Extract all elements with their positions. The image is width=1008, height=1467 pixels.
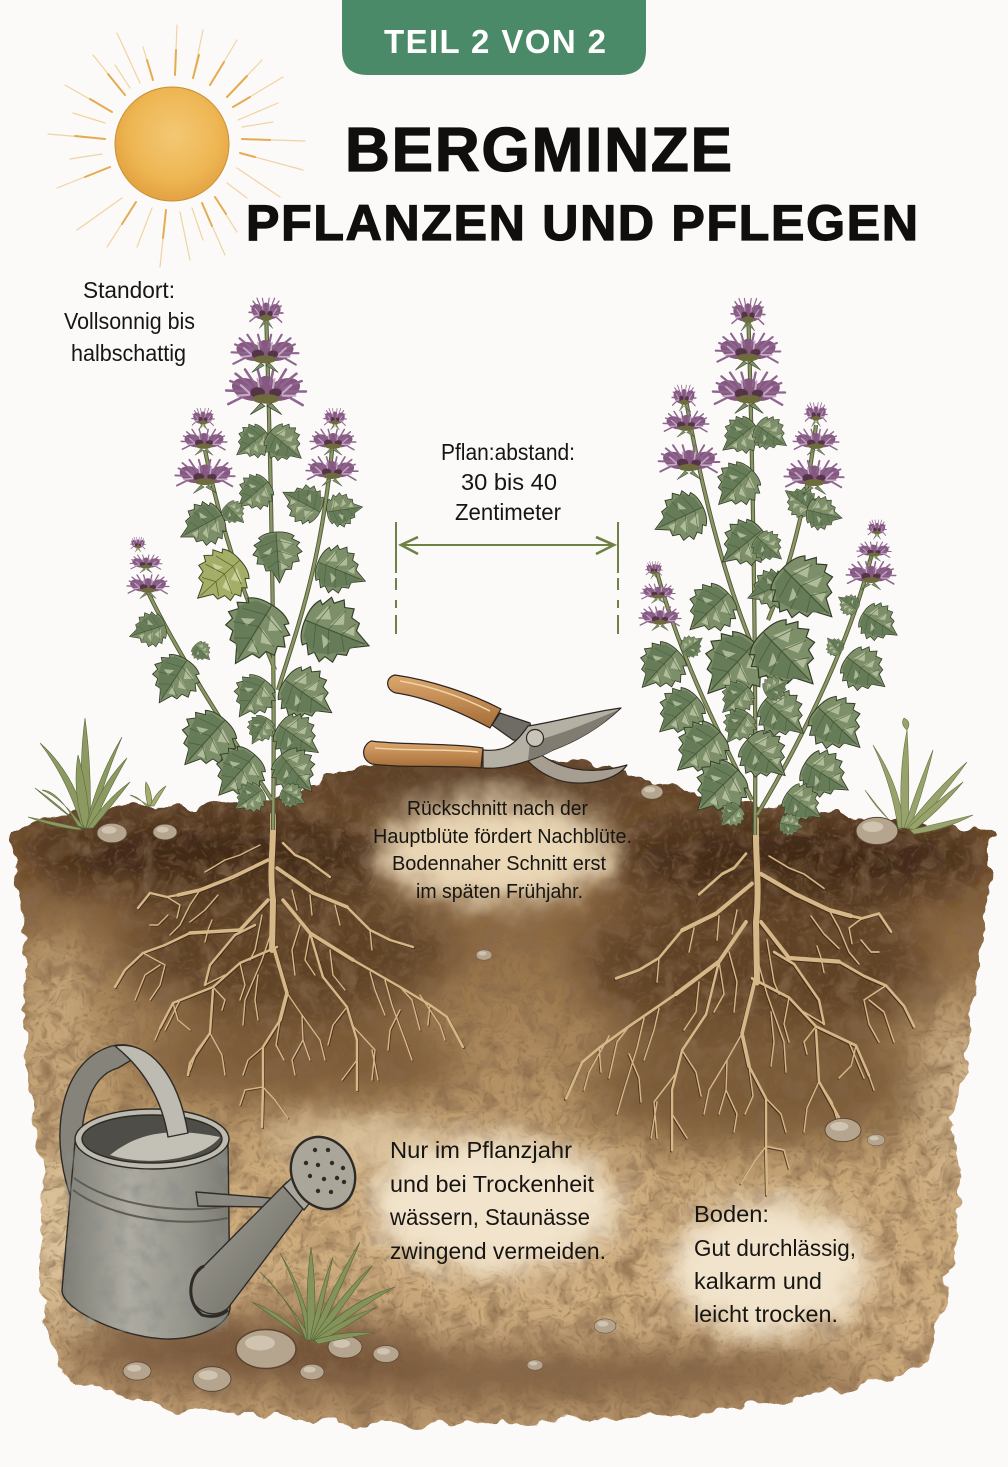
metal patina [66,1150,228,1332]
rose head [279,1126,367,1220]
pivot [526,730,544,746]
stems [147,310,333,830]
text: watering note [389,1137,606,1264]
upper handle [388,675,501,728]
soil washes and texture [0,740,1008,1467]
text: location: Vollsonnig bis [64,308,195,334]
title: BERGMINZE [345,116,732,185]
text: location [64,277,195,366]
soil base [0,750,1008,1440]
title: PFLANZEN UND PFLEGEN [246,195,918,251]
spout brace [196,1192,270,1207]
foliage [124,417,381,822]
stems [655,305,874,835]
grass tuft: left [28,718,166,830]
stones [97,785,898,1391]
left plant roots [115,815,464,1128]
text: pruning note: Rückschnitt nach der [407,798,588,820]
text: watering note: zwingend vermeiden. [390,1238,606,1264]
foliage [624,409,908,839]
grass tuft: beside can [252,1242,395,1344]
spout flange [191,1266,228,1316]
banner: part label: TEIL 2 VON 2 [384,23,606,60]
right plant roots [565,820,914,1195]
icon: pruning shears [364,675,627,783]
can handle [60,1045,145,1195]
title [246,116,918,251]
can opening [75,1109,229,1169]
lower handle [364,741,483,768]
text: soil note: Boden: [694,1201,769,1227]
soil cross-section [0,740,1008,1467]
text: pruning note [373,798,632,903]
text: plant spacing: Pflan:abstand: [441,439,575,465]
long faint rays [48,25,305,267]
text: location: halbschattig [71,340,186,366]
grass tuft: right [865,718,973,834]
icon: sun [48,25,305,267]
text: soil note: leicht trocken. [694,1301,838,1327]
plant: left mint [124,298,381,830]
text: pruning note: Hauptblüte fördert Nachblüte. [373,826,632,848]
text: plant spacing: 30 bis 40 [461,469,557,495]
banner: part label [342,0,646,75]
icon: watering can [60,1045,367,1339]
flower spikes [639,299,896,631]
text: soil note: kalkarm und [694,1268,822,1294]
text: watering note: wässern, Staunässe [389,1204,590,1230]
upper blade and jaw [483,708,621,768]
short strong rays [75,50,270,238]
text: soil note [694,1201,856,1327]
text: soil note: Gut durchlässig, [694,1235,856,1261]
flower spikes [127,298,358,599]
light patch behind soil note [670,1200,870,1336]
lower blade [522,747,627,783]
spout [191,1182,305,1314]
spout collar [283,1178,312,1210]
plant: right mint [624,299,908,839]
can body [62,1142,230,1339]
text: watering note: und bei Trockenheit [390,1171,595,1197]
light patch behind watering note [370,1137,620,1273]
text: plant spacing: Zentimeter [455,499,561,525]
body band [73,1178,228,1222]
surface band over the hump [340,766,650,800]
text: pruning note: im späten Frühjahr. [416,881,583,903]
handle front [115,1045,188,1137]
arrow: spacing dimension [396,522,618,634]
blade shadow [528,710,618,760]
rose holes [304,1148,346,1194]
upper handle arm [492,713,534,742]
text: plant spacing [441,439,575,525]
text: location: Standort: [83,277,175,303]
text: watering note: Nur im Pflanzjahr [390,1137,572,1163]
light clearing behind pruning note [375,800,615,904]
text: pruning note: Bodennaher Schnitt erst [392,853,606,875]
